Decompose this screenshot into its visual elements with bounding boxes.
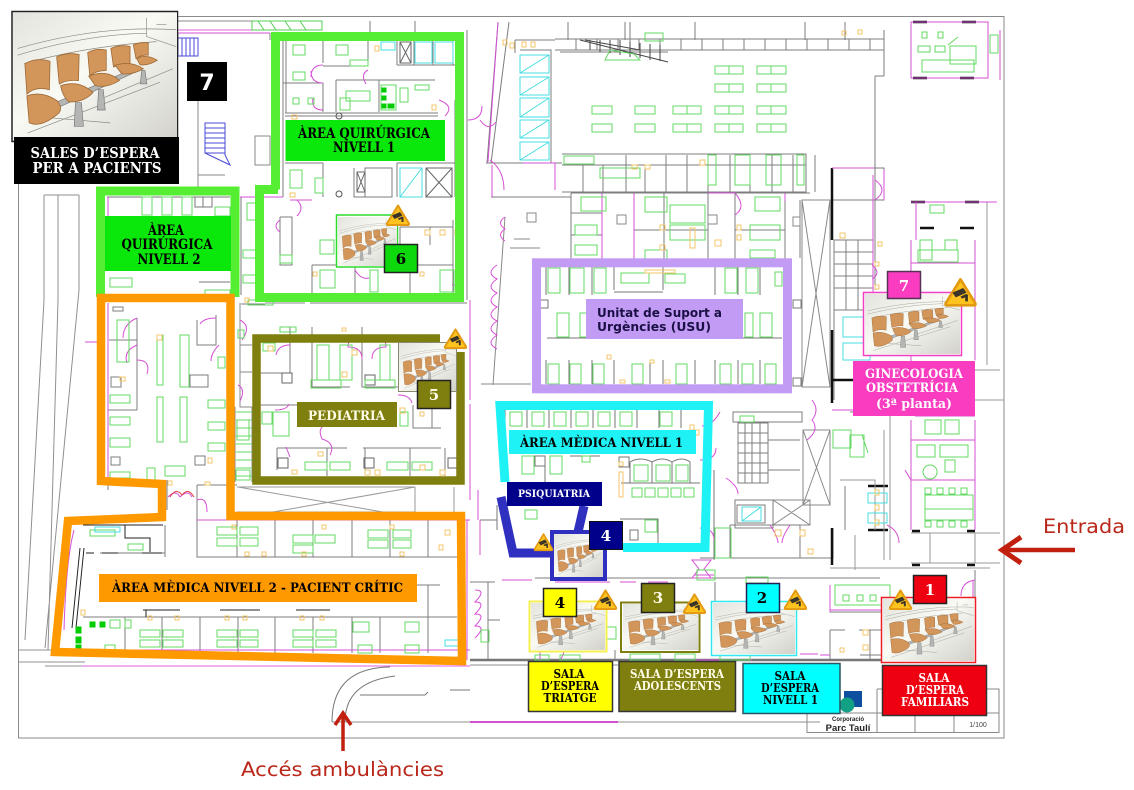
waiting room 3: adolescents: SALA D’ESPERA — [630, 667, 725, 681]
waiting room 7: Ginecologia Obstetrícia: OBSTETRÍCIA — [866, 380, 959, 396]
column markers — [336, 113, 342, 197]
zone: Unitat de Suport a Urgències: Urgències (USU) — [597, 319, 711, 334]
waiting room 4: triatge: TRIATGE — [544, 691, 596, 705]
green furniture and beds — [592, 33, 786, 132]
waiting room 2: nivell 1 — [712, 584, 840, 714]
waiting room 4: triatge: SALA — [554, 667, 585, 681]
walls of the plan — [241, 21, 467, 304]
zone: Àrea mèdica nivell 2 - pacient crític — [55, 298, 462, 661]
waiting room 1: familiars: SALA — [918, 671, 950, 685]
waiting room 2: nivell 1: SALA — [774, 669, 806, 683]
zone: Àrea quirúrgica nivell 1 — [260, 36, 460, 298]
black number badge 7: 7 — [199, 71, 215, 96]
logo: Parc Taulí: Parc Taulí — [826, 723, 871, 734]
arrow: Entrada — [1002, 515, 1125, 563]
floor plan drawing — [18, 16, 1004, 738]
zone: Àrea mèdica nivell 2 - pacient crític: ÀREA MÈDICA NIVELL 2 - PACIENT CRÍTIC — [111, 580, 403, 596]
zone: Psiquiatria with waiting room 4 — [501, 482, 622, 579]
waiting room 7: Ginecologia Obstetrícia: 7 — [899, 277, 909, 295]
legend: patient waiting rooms photo and caption — [12, 12, 179, 184]
legend: patient waiting rooms photo and caption: PER A PACIENTS — [32, 160, 162, 177]
waiting room 6: 6 — [396, 250, 406, 268]
waiting room 2: nivell 1: D’ESPERA — [761, 681, 820, 695]
magenta partition lines and doors — [108, 22, 1000, 360]
black number badge 7 — [187, 62, 227, 101]
logo: Parc Taulí: Corporació — [832, 717, 864, 723]
logo: Parc Taulí — [826, 691, 987, 734]
orange fixtures — [245, 30, 882, 652]
cyan rooms — [95, 42, 887, 646]
zone: Àrea mèdica nivell 1 — [500, 406, 708, 548]
top hall walls — [487, 22, 884, 165]
logo: Parc Taulí: 1/100 — [969, 722, 987, 729]
zone: Àrea quirúrgica nivell 2 — [100, 191, 235, 297]
legend: patient waiting rooms photo and caption: SALES D’ESPERA — [30, 145, 160, 162]
waiting room 1: familiars: 1 — [925, 581, 935, 599]
waiting room 2: nivell 1: NIVELL 1 — [763, 693, 818, 707]
waiting room 6 — [336, 206, 418, 272]
zone: Pediatria with waiting room 5: 5 — [429, 386, 439, 404]
waiting room 4: triatge: 4 — [555, 594, 565, 612]
waiting room 3: adolescents — [619, 584, 736, 712]
waiting room 1: familiars — [882, 576, 986, 716]
waiting room 4: triatge — [528, 588, 616, 712]
plan frame — [18, 16, 1004, 738]
zone: Àrea quirúrgica nivell 1: NIVELL 1 — [333, 140, 395, 156]
waiting room 7: Ginecologia Obstetrícia: (3ª planta) — [876, 397, 952, 412]
waiting room 7: Ginecologia Obstetrícia — [853, 272, 975, 416]
zone: Àrea mèdica nivell 1: ÀREA MÈDICA NIVELL 1 — [519, 435, 683, 451]
zone: Psiquiatria with waiting room 4: 4 — [601, 527, 611, 545]
waiting room 1: familiars: FAMILIARS — [901, 695, 969, 709]
waiting room 4: triatge: D’ESPERA — [541, 679, 600, 693]
arrow: Accés ambulàncies: Accés ambulàncies — [241, 758, 444, 781]
zone: Àrea quirúrgica nivell 2: QUIRÚRGICA — [122, 235, 213, 253]
USU and medical area walls — [540, 266, 801, 386]
waiting room 2: nivell 1: 2 — [757, 589, 767, 607]
zone: Àrea quirúrgica nivell 2: NIVELL 2 — [138, 252, 200, 268]
waiting room 3: adolescents: ADOLESCENTS — [633, 679, 721, 693]
zone: Unitat de Suport a Urgències — [536, 263, 788, 389]
zone: Àrea quirúrgica nivell 1: ÀREA QUIRÚRGICA — [297, 124, 431, 142]
waiting room 1: familiars: D’ESPERA — [906, 683, 965, 697]
waiting room 7: Ginecologia Obstetrícia: GINECOLOGIA — [865, 367, 964, 382]
zone: Unitat de Suport a Urgències: Unitat de Suport a — [597, 305, 722, 320]
arrow: Accés ambulàncies — [241, 713, 444, 781]
zone: Pediatria with waiting room 5 — [256, 329, 466, 480]
waiting room 3: adolescents: 3 — [653, 589, 663, 607]
zone: Psiquiatria with waiting room 4: PSIQUIATRIA — [518, 488, 591, 500]
zone: Àrea quirúrgica nivell 2: ÀREA — [147, 221, 185, 239]
zone: Pediatria with waiting room 5: PEDIATRIA — [308, 409, 386, 424]
arrow: Entrada: Entrada — [1043, 515, 1125, 538]
